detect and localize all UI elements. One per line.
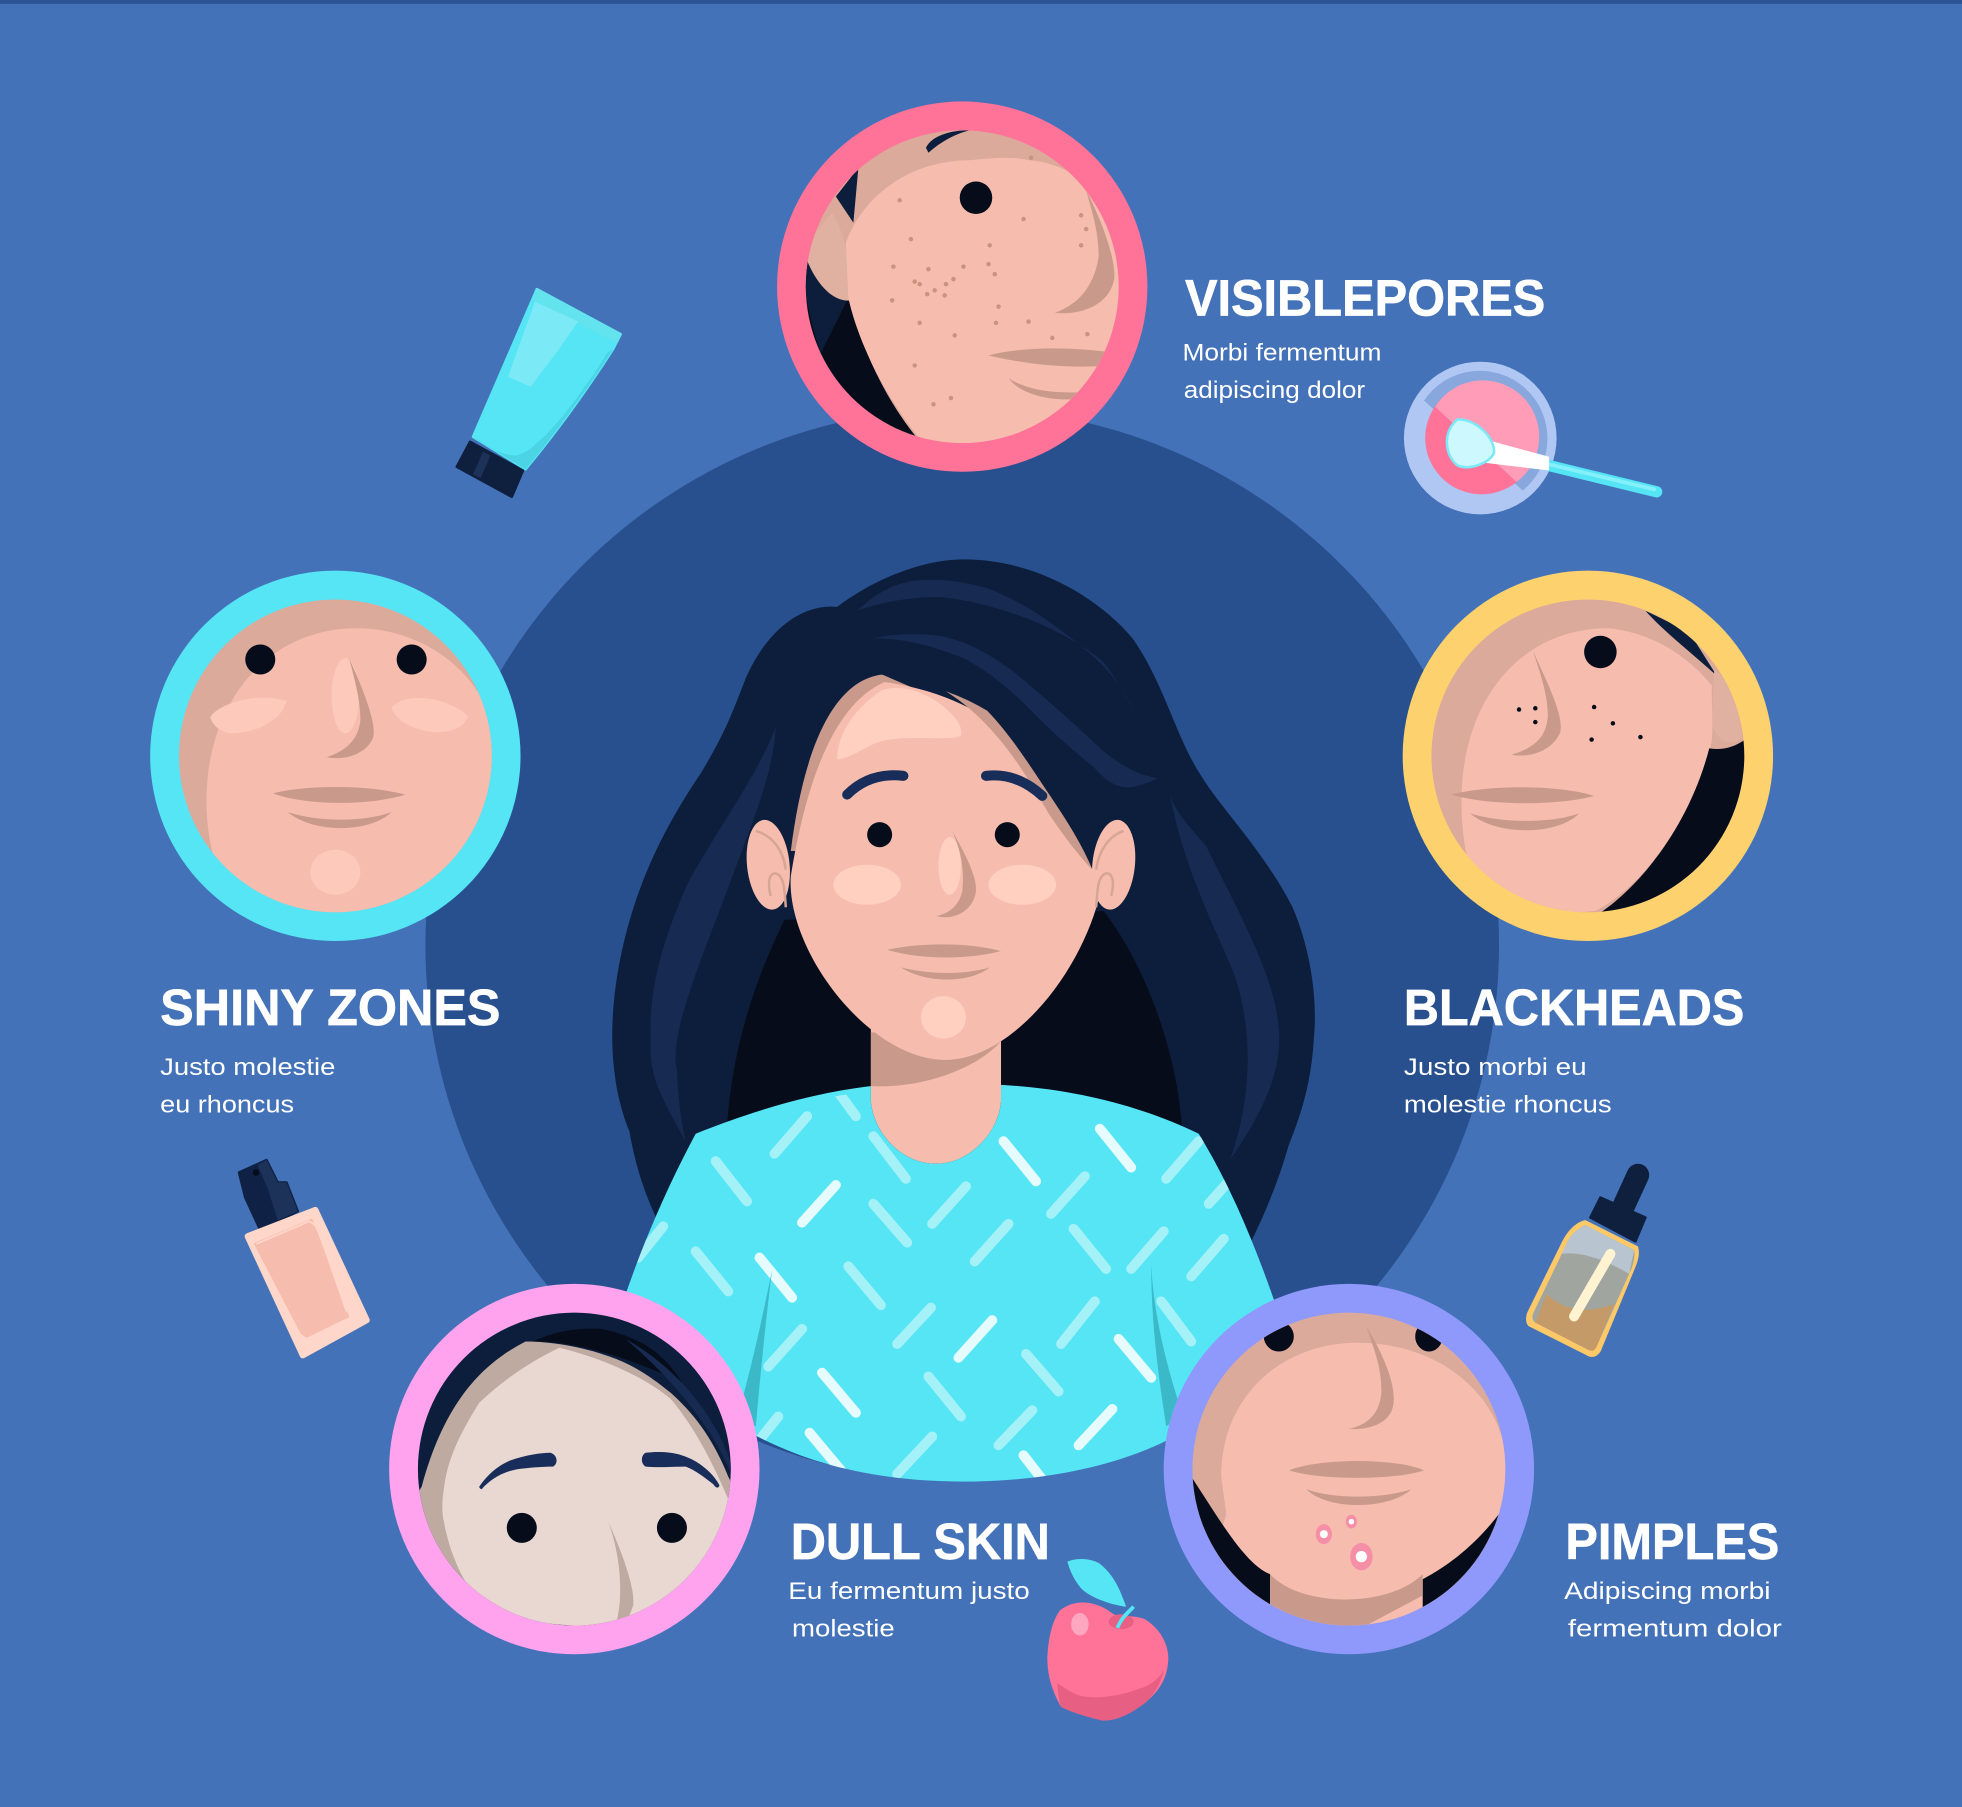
neck [871, 1014, 1001, 1164]
face shadow [788, 675, 1001, 851]
sleeve folds [738, 1270, 772, 1427]
left ear [742, 818, 794, 912]
zoomed face [1426, 594, 1752, 920]
description: visible pores: Morbi fermentum [1182, 339, 1381, 366]
icon: blush compact with brush [1404, 362, 1657, 514]
panel: visible pores [777, 101, 1147, 472]
panel: shiny zones [150, 571, 521, 941]
hair shadow on forehead [932, 676, 1101, 871]
right ear [1088, 818, 1139, 912]
description: visible pores: adipiscing dolor [1184, 377, 1365, 404]
hair right strand [1170, 795, 1279, 1160]
description: shiny zones [160, 1054, 335, 1118]
central dark circle [425, 408, 1499, 1482]
description: pimples [1564, 1578, 1782, 1643]
periwinkle ring [1164, 1284, 1534, 1654]
chin highlight [921, 996, 966, 1039]
zoomed face [1189, 1308, 1514, 1639]
icon: foundation bottle [239, 1160, 367, 1355]
heading: blackheads: BLACKHEADS [1404, 979, 1744, 1036]
description: dull skin: molestie [792, 1616, 895, 1643]
description: blackheads: Justo morbi eu [1404, 1054, 1587, 1081]
heading: shiny zones: SHINY ZONES [160, 979, 501, 1036]
right eye [995, 822, 1020, 847]
description: blackheads: molestie rhoncus [1404, 1091, 1612, 1118]
yellow ring [1403, 571, 1773, 941]
neck shadow [871, 1032, 1001, 1086]
panel: dull skin [389, 1284, 760, 1654]
description: shiny zones: Justo molestie [160, 1054, 335, 1081]
description: blackheads [1404, 1054, 1612, 1118]
hair left front [771, 626, 882, 880]
magenta ring [389, 1284, 760, 1654]
description: pimples: fermentum dolor [1568, 1616, 1782, 1643]
zoomed face [175, 594, 501, 920]
right cheek [989, 865, 1056, 905]
hair front sweep [863, 613, 1164, 872]
nose [936, 831, 976, 917]
description: visible pores [1182, 339, 1381, 404]
right eyebrow [986, 775, 1042, 796]
hair highlight sweep [873, 634, 1157, 787]
lips [887, 944, 1001, 957]
description: shiny zones: eu rhoncus [160, 1091, 294, 1118]
hair left strand [650, 727, 776, 1141]
hair back [612, 559, 1315, 1289]
left eye [867, 822, 892, 847]
nose highlight [938, 837, 961, 895]
description: pimples: Adipiscing morbi [1564, 1578, 1771, 1605]
icon: apple [1047, 1559, 1168, 1721]
heading: dull skin: DULL SKIN [791, 1513, 1050, 1570]
left eyebrow [847, 775, 903, 795]
heading: pimples: PIMPLES [1565, 1513, 1779, 1570]
left cheek [833, 865, 901, 905]
shirt dash pattern [638, 1089, 1229, 1483]
sleeve folds right [1151, 1264, 1182, 1427]
zoomed face [801, 125, 1132, 451]
description: dull skin [788, 1578, 1030, 1643]
dark hair behind neck [726, 911, 1182, 1151]
panel: blackheads [1403, 571, 1773, 941]
hair highlight top [857, 580, 1136, 716]
panel: pimples [1164, 1284, 1534, 1654]
pink ring [777, 101, 1147, 472]
icon: serum dropper [1526, 1175, 1645, 1357]
shirt [623, 1085, 1279, 1482]
lower lip [901, 967, 990, 980]
zoomed face [418, 1312, 731, 1626]
woman illustration [612, 559, 1315, 1483]
cyan ring [150, 571, 521, 941]
face [791, 682, 1105, 1060]
forehead highlight [837, 688, 961, 760]
description: dull skin: Eu fermentum justo [788, 1578, 1030, 1605]
icon: cream tube [457, 289, 621, 497]
heading: visible pores: VISIBLEPORES [1185, 269, 1545, 326]
